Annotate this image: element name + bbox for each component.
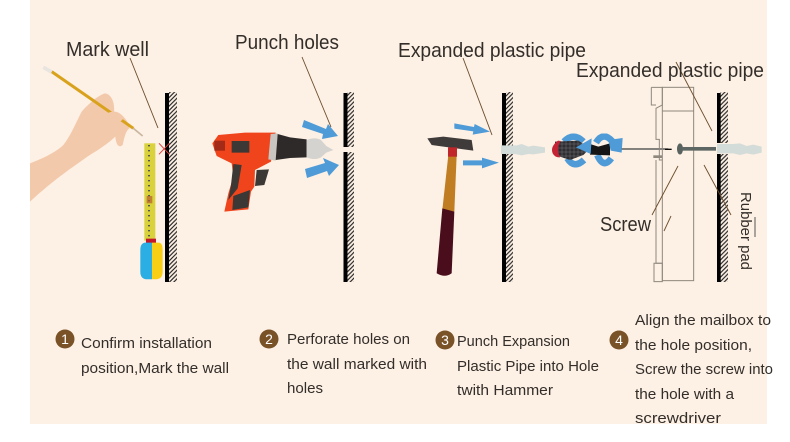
- icon: tape measure: [140, 143, 163, 279]
- drill collar: [268, 133, 278, 161]
- step 1 text: Confirm installation: [81, 335, 212, 352]
- step 4 text: the hole with a: [635, 386, 735, 403]
- label: expanded plastic pipe 2: Expanded plastic pipe: [576, 60, 764, 82]
- icon: pencil: [43, 67, 143, 136]
- arrow: hammer lower: [463, 158, 499, 168]
- wall 2 with hole: [344, 92, 354, 282]
- screw thread: [683, 147, 716, 151]
- drill grip: [228, 164, 269, 210]
- leader: rubber pad: [704, 165, 731, 215]
- screw and plug: [677, 143, 762, 155]
- step 3 text: Punch Expansion: [457, 333, 570, 350]
- rubber pad tick: [754, 217, 756, 237]
- wall 1: [165, 92, 177, 282]
- step 3: [436, 330, 599, 399]
- icon: red cross mark: [159, 143, 169, 154]
- label: rubber pad: Rubber pad: [737, 192, 754, 270]
- hammer head: [427, 137, 473, 151]
- hammer handle wood: [442, 155, 457, 212]
- step 2 text: [287, 331, 427, 397]
- hammer collar: [448, 147, 457, 157]
- badge 1: [56, 330, 74, 348]
- badge 1: 1: [61, 331, 69, 347]
- expansion plug: [717, 143, 762, 155]
- step 4 text: the hole position,: [635, 337, 752, 354]
- badge 4: 4: [615, 332, 623, 348]
- step 3 text: [457, 333, 599, 399]
- step 3 illustration: hammer: [427, 123, 545, 276]
- drill motor: [276, 134, 307, 160]
- expansion plug: [501, 144, 545, 155]
- label: mark well: Mark well: [66, 39, 149, 61]
- icon: hand: [30, 93, 129, 202]
- blue arrow heads: [576, 138, 623, 154]
- screw head: [677, 143, 683, 155]
- badge 3: [436, 330, 454, 350]
- step 2: [260, 330, 427, 397]
- leader: punch holes: [302, 57, 331, 127]
- step 1 text: position,Mark the wall: [81, 360, 229, 377]
- hammer handle dark: [437, 208, 454, 276]
- step 2 text: holes: [287, 380, 323, 397]
- badge 3: 3: [441, 332, 449, 348]
- handle neck: [590, 143, 610, 155]
- step 2 illustration: drill: [212, 133, 333, 212]
- step 4 text: Align the mailbox to: [635, 312, 771, 329]
- wall 3: [502, 92, 513, 282]
- leader: expanded pipe step 4: [676, 62, 712, 131]
- step 4 text: [635, 312, 773, 427]
- step 3 text: twith Hammer: [457, 382, 553, 399]
- drill vent and panel: [232, 141, 249, 153]
- shaft: [622, 148, 668, 150]
- badge 2: [260, 330, 278, 348]
- arrow: drill lower: [305, 158, 339, 178]
- step 4: [610, 312, 773, 427]
- step 2 text: the wall marked with: [287, 356, 427, 373]
- handle grip: [555, 141, 590, 160]
- mailbox outline: [651, 87, 694, 282]
- step 3 text: Plastic Pipe into Hole: [457, 358, 599, 375]
- leader: screw: [652, 166, 678, 215]
- blue rotation arcs: [564, 136, 613, 164]
- leader: expanded pipe step 3: [463, 58, 492, 135]
- arrow: hammer upper: [454, 123, 490, 135]
- handle cap: [552, 141, 561, 157]
- shaft tip: [665, 149, 672, 150]
- leader: mailbox tick: [664, 216, 671, 231]
- leader: mark well: [130, 58, 158, 128]
- label: expanded plastic pipe 1: Expanded plastic pipe: [398, 40, 586, 62]
- screwdriver: [552, 136, 672, 164]
- arrow: drill upper: [302, 120, 338, 139]
- badge 4: [610, 330, 628, 350]
- step 2 text: Perforate holes on: [287, 331, 410, 348]
- step 1: [56, 330, 229, 377]
- step 4 text: screwdriver: [635, 410, 721, 427]
- label: screw: Screw: [600, 214, 652, 236]
- step 1 illustration: hand, pencil, tape: [30, 67, 169, 279]
- step 4 text: Screw the screw into: [635, 361, 773, 378]
- step 1 text: [81, 335, 229, 377]
- badge 2: 2: [265, 331, 273, 347]
- wall 4 with hole: [717, 92, 728, 282]
- drill chuck: [307, 138, 333, 159]
- drill body: [212, 133, 276, 212]
- drill vent: [214, 141, 225, 151]
- label: punch holes: Punch holes: [235, 32, 339, 54]
